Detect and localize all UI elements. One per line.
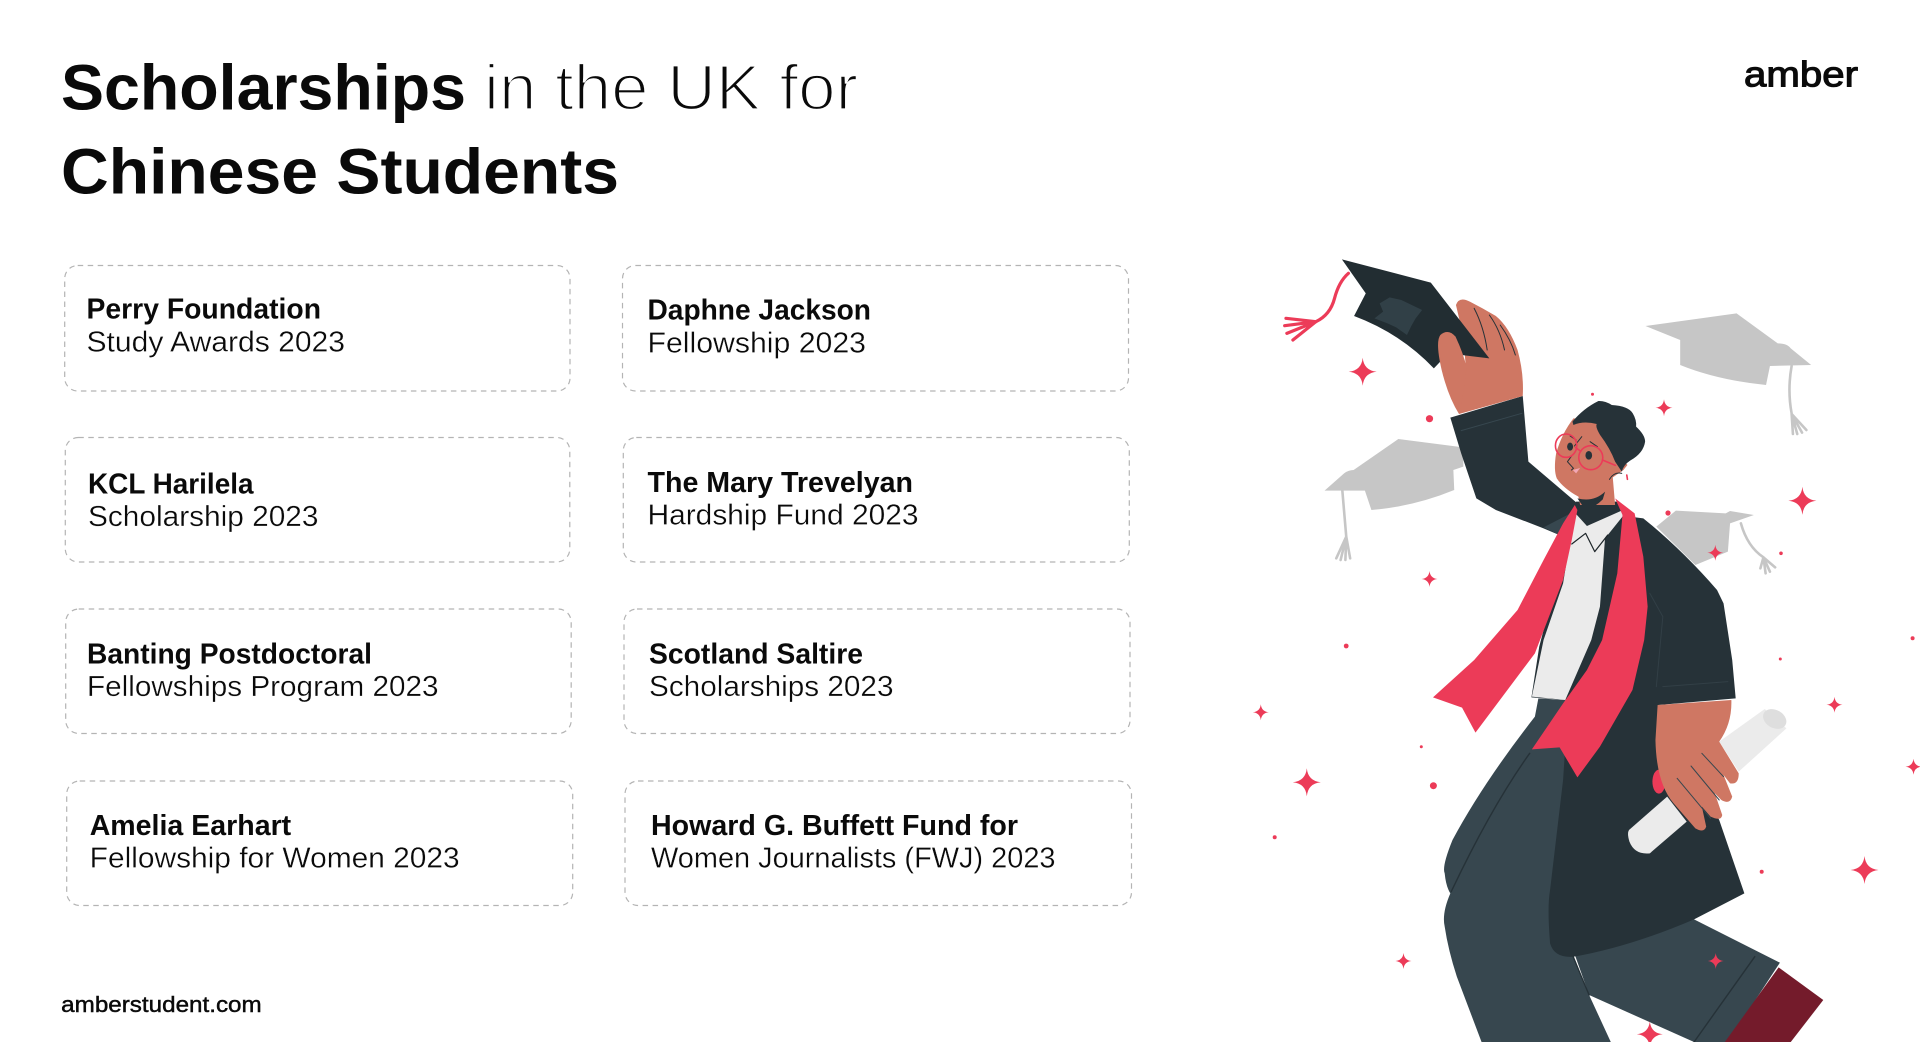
gray cap: left: [1325, 439, 1463, 560]
card: Banting Postdoctoral: Banting Postdoctoral: [87, 638, 372, 670]
graduate figure: [1285, 259, 1823, 1042]
card: Daphne Jackson: [622, 266, 1128, 391]
scroll: end cap: [1758, 706, 1791, 732]
front leg: [1444, 698, 1611, 1042]
sparkle stars: [1253, 358, 1920, 969]
card: Amelia Earhart: [67, 781, 573, 906]
card: Howard G. Buffett Fund: Howard G. Buffett Fund for: [651, 810, 1018, 842]
card: Banting Postdoctoral: Fellowships Program 2023: [87, 671, 438, 703]
trouser creases: [1451, 753, 1755, 1042]
card: Amelia Earhart: Amelia Earhart: [90, 810, 292, 842]
sleeve shadow: [1544, 513, 1570, 537]
illustration: graduate throwing cap: [1253, 259, 1920, 1042]
title: Scholarships: [61, 52, 466, 124]
card: Perry Foundation: Perry Foundation: [86, 293, 321, 325]
red cuff peek: [1652, 770, 1665, 794]
title: Chinese Students: [61, 136, 619, 208]
glasses: [1555, 434, 1627, 479]
background graduation caps: [1325, 313, 1811, 573]
upper hand: [1456, 299, 1523, 414]
card: KCL Harilela: [65, 438, 570, 562]
scroll: lower part: [1628, 797, 1687, 854]
shoe: [1725, 967, 1823, 1042]
thumb: [1438, 332, 1466, 414]
card: Perry Foundation: Study Awards 2023: [86, 327, 345, 359]
card: Howard G. Buffett Fund: Women Journalists (FWJ) 2023: [651, 843, 1056, 875]
finger lines: lower hand: [1677, 753, 1724, 818]
eyes: [1567, 443, 1592, 460]
gray cap: behind shoulder: [1656, 511, 1775, 573]
card: Banting Postdoctoral: [66, 609, 571, 734]
card: The Mary Trevelyan: [623, 438, 1129, 562]
card: Daphne Jackson: Daphne Jackson: [648, 294, 871, 326]
card: KCL Harilela: Scholarship 2023: [88, 501, 318, 533]
sparkle dots: [1273, 393, 1915, 874]
gray cap: upper right: [1645, 313, 1811, 434]
scarf: left strip: [1433, 505, 1577, 733]
raised sleeve: [1450, 396, 1577, 537]
lower hand: [1655, 700, 1739, 830]
hair: [1572, 401, 1645, 472]
card: Scotland Saltire: Scholarships 2023: [649, 671, 894, 703]
card: Perry Foundation: [65, 266, 570, 391]
face: [1555, 418, 1627, 505]
scarf: right strip: [1532, 498, 1648, 777]
mouth: [1573, 468, 1580, 473]
title: [61, 52, 858, 208]
card: Amelia Earhart: Fellowship for Women 2023: [90, 843, 460, 875]
scroll: upper part: [1719, 709, 1786, 772]
card: Daphne Jackson: Fellowship 2023: [648, 328, 866, 360]
card: Scotland Saltire: Scotland Saltire: [649, 638, 863, 670]
card: The Mary Trevelyan: The Mary Trevelyan: [648, 467, 913, 499]
card: KCL Harilela: KCL Harilela: [88, 468, 254, 500]
neck and head: [1555, 401, 1645, 509]
cuff line: [1461, 413, 1522, 431]
cap shading: [1374, 297, 1422, 335]
website url: amberstudent.com: [61, 992, 262, 1017]
gown seam and sleeve crease: [1650, 593, 1728, 687]
finger lines: upper hand: [1474, 308, 1515, 355]
title: in the UK for: [484, 52, 858, 124]
thrown cap: [1342, 259, 1489, 368]
back leg: [1570, 919, 1780, 1042]
sparkles over figure: [1637, 545, 1724, 1042]
neck shadow: [1577, 492, 1605, 509]
shirt: [1532, 530, 1609, 700]
cap tassel: [1285, 273, 1348, 340]
logo: amber: amber: [1744, 54, 1858, 95]
eyebrows, nose and ear lines: [1567, 436, 1622, 479]
collar: [1572, 511, 1624, 552]
gown strip beside shirt: [1531, 502, 1622, 702]
card: The Mary Trevelyan: Hardship Fund 2023: [648, 500, 918, 532]
card: Scotland Saltire: [624, 609, 1130, 734]
card: Howard G. Buffett Fund: [625, 781, 1132, 906]
gown body: [1549, 513, 1744, 957]
